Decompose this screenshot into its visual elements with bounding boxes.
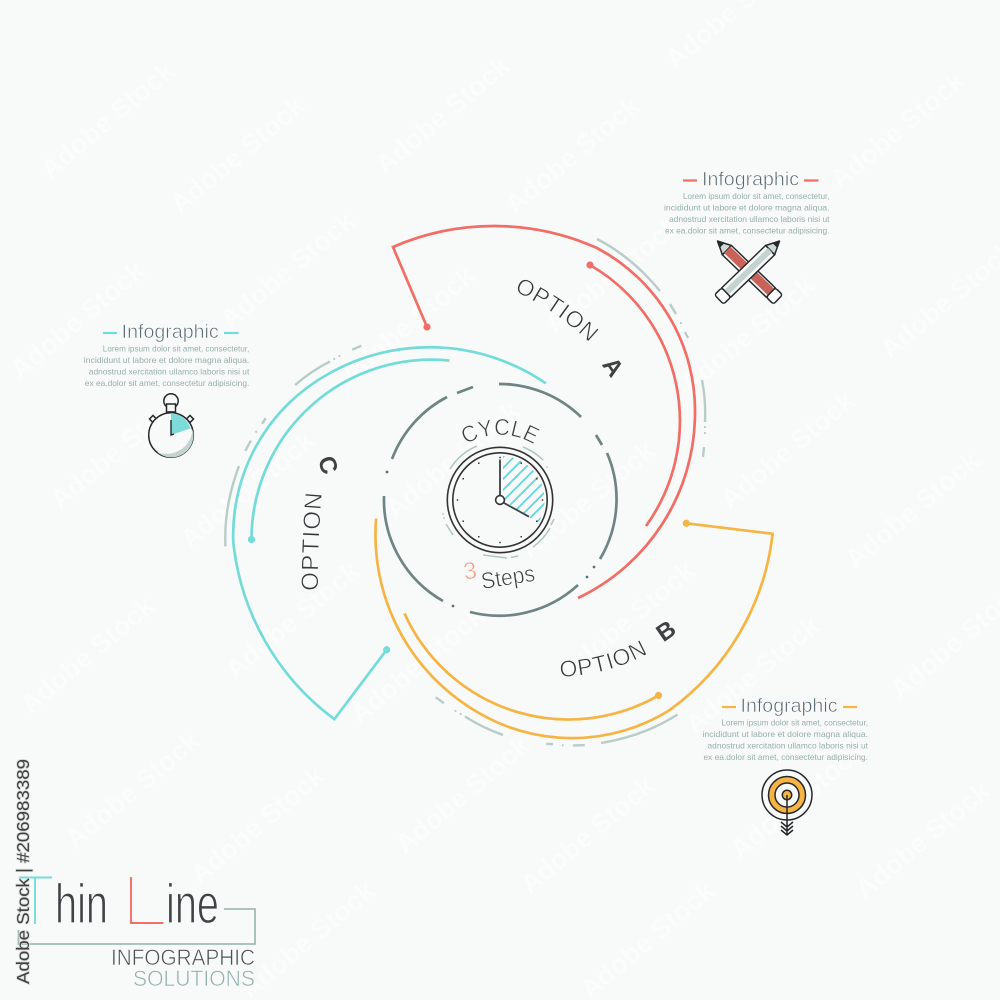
icon: target with arrow (762, 770, 812, 835)
dashes: option A outer accents (597, 239, 706, 457)
dot: option C line end (382, 645, 392, 655)
dot: option B line end (681, 518, 691, 528)
label: OPTION A: A (597, 352, 629, 382)
text: Adobe Stock (185, 760, 331, 890)
heading: 3 Steps (462, 557, 537, 594)
logo: Thin Line Infographic Solutions (18, 872, 255, 991)
body: incididunt ut labore et dolore magna aliqua. (664, 202, 830, 212)
body (702, 718, 869, 762)
panel: option B spiral arm (312, 358, 791, 815)
text: Adobe Stock (15, 590, 161, 720)
text: Adobe Stock (175, 425, 321, 555)
body: ex ea.dolor sit amet, consectetur adipisicing. (665, 225, 830, 235)
arc: option A outer line (393, 226, 695, 598)
text: Adobe Stock (725, 735, 871, 865)
body: incididunt ut labore et dolore magna aliqua. (84, 355, 249, 365)
body: Lorem ipsum dolor sit amet, consectetur, (722, 718, 868, 728)
text block: left infographic (84, 321, 250, 388)
dashes: option C outer accents (171, 343, 414, 546)
title: Infographic (702, 168, 799, 190)
label: OPTION A: OPTION (518, 280, 598, 341)
logo line SOLUTIONS: SOLUTIONS (133, 966, 255, 991)
arc: option C outer line (165, 282, 638, 730)
label: OPTION B (560, 615, 681, 677)
text: Adobe Stock (675, 270, 821, 400)
text: Adobe Stock (500, 90, 646, 220)
text: Adobe Stock (45, 385, 191, 515)
text: Adobe Stock (540, 210, 686, 340)
label: OPTION A (518, 280, 629, 382)
heading: CYCLE (462, 418, 540, 444)
dashes: option B outer accents (434, 606, 678, 809)
body: Lorem ipsum dolor sit amet, consectetur, (103, 344, 249, 354)
arc: option C inner line (207, 331, 478, 540)
text: Adobe Stock (515, 435, 661, 565)
body (664, 191, 830, 235)
text: Adobe Stock (335, 260, 481, 390)
stock credit vertical text: Adobe Stock | #206983389 (13, 759, 33, 984)
panel: option C spiral arm (160, 273, 638, 730)
clock icon (442, 445, 554, 559)
text: Adobe Stock (515, 770, 661, 900)
dot: option A inner line end (586, 261, 594, 269)
text block: top right infographic (664, 168, 830, 235)
body: incididunt ut labore et dolore magna aliqua. (702, 729, 868, 739)
title: Infographic (740, 695, 838, 717)
logo letter T (19, 878, 52, 924)
logo word hin: hin (55, 872, 108, 935)
panel: option A spiral arm (393, 226, 706, 598)
label: OPTION B: B (651, 615, 681, 647)
heading: CYCLE: CYCLE (462, 418, 540, 444)
logo letter L (131, 877, 164, 923)
dot: option C inner line end (247, 535, 256, 544)
arc: option B inner line (388, 565, 659, 773)
text: Adobe Stock (5, 255, 151, 385)
dot: option B inner line end (654, 691, 663, 700)
logo line INFOGRAPHIC: INFOGRAPHIC (111, 945, 255, 970)
text: Adobe Stock (715, 385, 861, 515)
title: Infographic (122, 321, 219, 343)
text: Adobe Stock (35, 55, 181, 185)
text: Adobe Stock (850, 775, 996, 905)
body: Lorem ipsum dolor sit amet, consectetur, (683, 191, 830, 201)
arc: option B outer line (318, 358, 791, 806)
dot: option A line end (423, 323, 431, 331)
body: adnostrud xercitation ullamco laboris nisi ut (708, 740, 869, 750)
icon: stopwatch (149, 394, 194, 457)
text: Adobe Stock (345, 600, 491, 730)
clock outer accents (442, 446, 554, 558)
text: Adobe Stock (60, 725, 206, 855)
body: adnostrud xercitation ullamco laboris nisi ut (89, 366, 250, 376)
arc: option A inner line (590, 265, 680, 526)
label: OPTION C: C (312, 452, 343, 478)
heading: 3 Steps: 3 (462, 557, 479, 586)
body (84, 344, 250, 388)
label: OPTION C (302, 452, 343, 590)
body: ex ea.dolor sit amet, consectetur adipisicing. (85, 378, 249, 388)
text: Adobe Stock (165, 90, 311, 220)
gray central ring (384, 384, 617, 616)
icon: crossed pencils (713, 236, 784, 304)
body: adnostrud xercitation ullamco laboris nisi ut (669, 214, 830, 224)
text: Adobe Stock (555, 555, 701, 685)
clock hatch sector (503, 456, 544, 523)
label: OPTION B: OPTION (560, 640, 646, 677)
label: OPTION C: OPTION (302, 494, 322, 590)
logo frame (18, 909, 255, 944)
text: Adobe Stock (215, 205, 361, 335)
text block: bottom right infographic (702, 695, 869, 762)
logo word ine: ine (166, 872, 219, 935)
text: Adobe Stock (680, 610, 826, 740)
text: Adobe Stock (825, 65, 971, 195)
text: Adobe Stock (380, 395, 526, 525)
heading: 3 Steps: Steps (479, 560, 537, 594)
text: Adobe Stock (840, 445, 986, 575)
text: Adobe Stock (370, 50, 516, 180)
body: ex ea.dolor sit amet, consectetur adipisicing. (704, 752, 868, 762)
text: Adobe Stock (390, 730, 536, 860)
text: Adobe Stock (220, 555, 366, 685)
